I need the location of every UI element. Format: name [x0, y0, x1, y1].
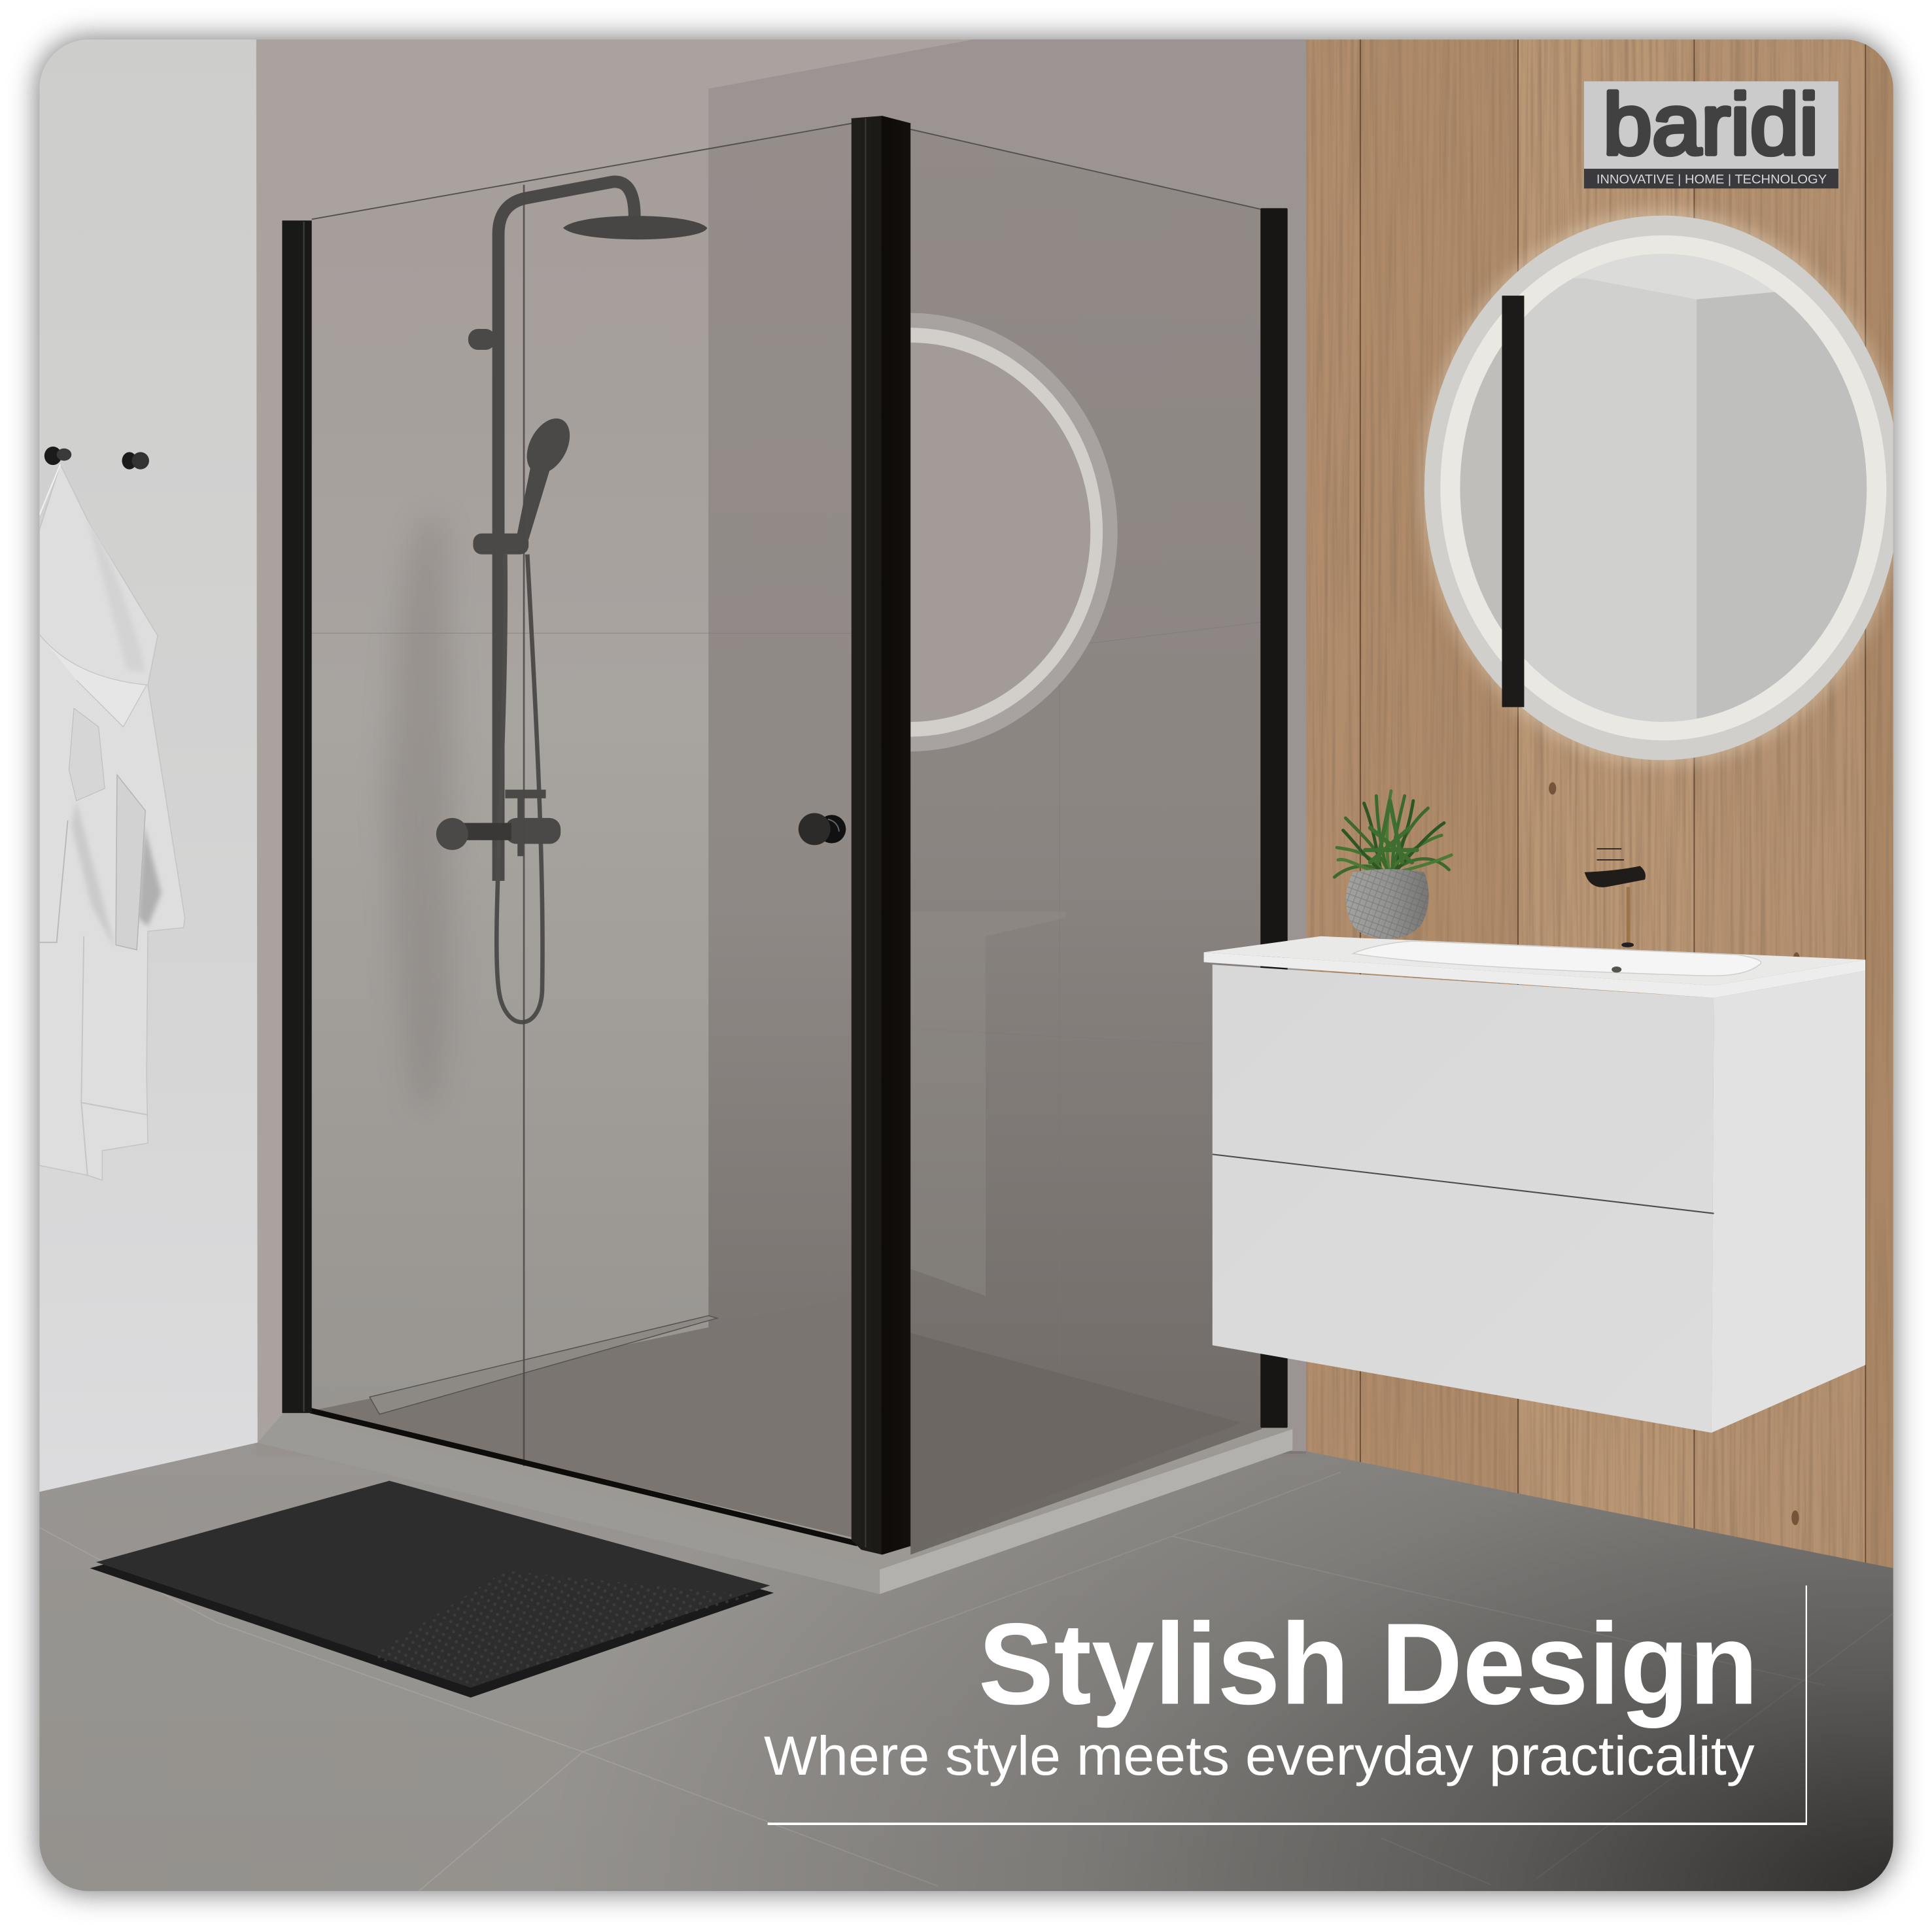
mirrored door post: [1502, 296, 1524, 707]
faucet handle: [1585, 866, 1646, 887]
round LED mirror: [1421, 209, 1904, 766]
logo: baridi: [1584, 76, 1838, 188]
basin counter edge: [1204, 952, 1865, 998]
mirror back glow: [1421, 209, 1904, 766]
tray front-left face: [258, 1413, 880, 1594]
left post profile: [282, 220, 312, 1413]
back wall: [256, 39, 972, 1293]
mirror reflections: [1454, 234, 1885, 734]
knob rear: [818, 815, 846, 844]
right wall shade: [708, 39, 1306, 1454]
vanity reflection in glass: [910, 912, 1066, 1296]
hand shower head: [518, 411, 579, 481]
robe silhouette: [39, 464, 185, 1180]
mat surface: [96, 1480, 770, 1688]
bath mat: [90, 1480, 774, 1698]
centre post profile: [852, 116, 910, 1555]
right door post: [1260, 208, 1288, 1427]
riser rail and arm: [498, 182, 634, 881]
potted plant: [1334, 791, 1451, 939]
tray top: [283, 1306, 1292, 1569]
centre glass seam: [523, 185, 525, 1466]
mirror frosted frame: [1424, 216, 1900, 760]
logo tagline: INNOVATIVE | HOME | TECHNOLOGY: [1596, 173, 1827, 187]
glass enclosure interior: [312, 123, 1262, 1555]
floor: [39, 1443, 1893, 1891]
logo wordmark: baridi: [1603, 76, 1819, 172]
tile seams: [312, 616, 1262, 1367]
left door post: [282, 220, 312, 1413]
heading: Stylish Design: [978, 1599, 1758, 1728]
mirror reflection on side glass: [701, 313, 1118, 751]
mat texture: [370, 1571, 751, 1685]
wood panel wall: [1306, 39, 1894, 1579]
plant leaves: [1334, 791, 1451, 877]
cabinet front: [1213, 965, 1714, 1433]
drawer gap: [1213, 1154, 1714, 1214]
bathrobe: [39, 464, 185, 1180]
wood planks: [1306, 39, 1894, 1579]
hook right: [122, 452, 137, 470]
mirror reflected ceiling: [1454, 234, 1885, 299]
linear floor drain: [370, 1316, 717, 1414]
door knob: [799, 813, 846, 845]
tray front-right face: [880, 1429, 1292, 1594]
reflected frosted frame: [701, 313, 1118, 751]
hand shower handle: [516, 458, 549, 539]
centre door post: [852, 116, 910, 1555]
faucet spout reflection: [1627, 887, 1630, 944]
bottom door rail: [311, 1410, 857, 1544]
knob front: [799, 813, 831, 845]
subheading: Where style meets everyday practicality: [764, 1725, 1755, 1786]
shower floor through glass: [312, 1296, 853, 1537]
corner frame lines: [1806, 1586, 1807, 1824]
robe shadow reflection: [385, 513, 454, 1115]
logo plate: [1584, 81, 1838, 169]
plant pot: [1346, 869, 1429, 939]
reflected mirror centre: [728, 343, 1090, 722]
back wall through glass: [312, 148, 708, 1410]
basin faucet: [1585, 849, 1646, 948]
mirror glass: [1460, 254, 1867, 722]
mat edge: [90, 1486, 774, 1698]
right wall through glass: [708, 123, 853, 1537]
logo strap: [1584, 169, 1838, 188]
hook left: [44, 447, 61, 465]
left white wall: [39, 39, 258, 1492]
mirror light ring: [1440, 235, 1886, 740]
basin counter top: [1204, 936, 1865, 985]
robe fold shadows: [138, 825, 162, 927]
shower system: [436, 182, 707, 1022]
slider clamp: [473, 534, 528, 555]
glass top edges: [312, 123, 1262, 219]
drain: [1612, 966, 1621, 972]
caption block: [764, 1586, 1807, 1824]
vanity unit: [1204, 936, 1865, 1433]
reflected light ring: [716, 328, 1103, 737]
robe belt and lapel: [71, 801, 116, 950]
floor tile lines: [39, 1472, 1893, 1891]
shower tray plinth: [258, 1306, 1292, 1594]
hose loop: [496, 555, 543, 1022]
side glass panel: [910, 129, 1262, 1555]
mirror reflected wall: [1697, 291, 1875, 734]
towel hooks: [44, 447, 149, 470]
hand shower: [516, 411, 579, 539]
cabinet side: [1712, 971, 1865, 1433]
thermostatic mixer: [505, 818, 561, 844]
wall bracket: [468, 329, 495, 350]
bottom dark gradient overlay: [39, 1443, 1894, 1892]
mirror left section: [1454, 279, 1503, 734]
sink bowl: [1353, 941, 1761, 976]
rain shower head: [563, 216, 707, 239]
